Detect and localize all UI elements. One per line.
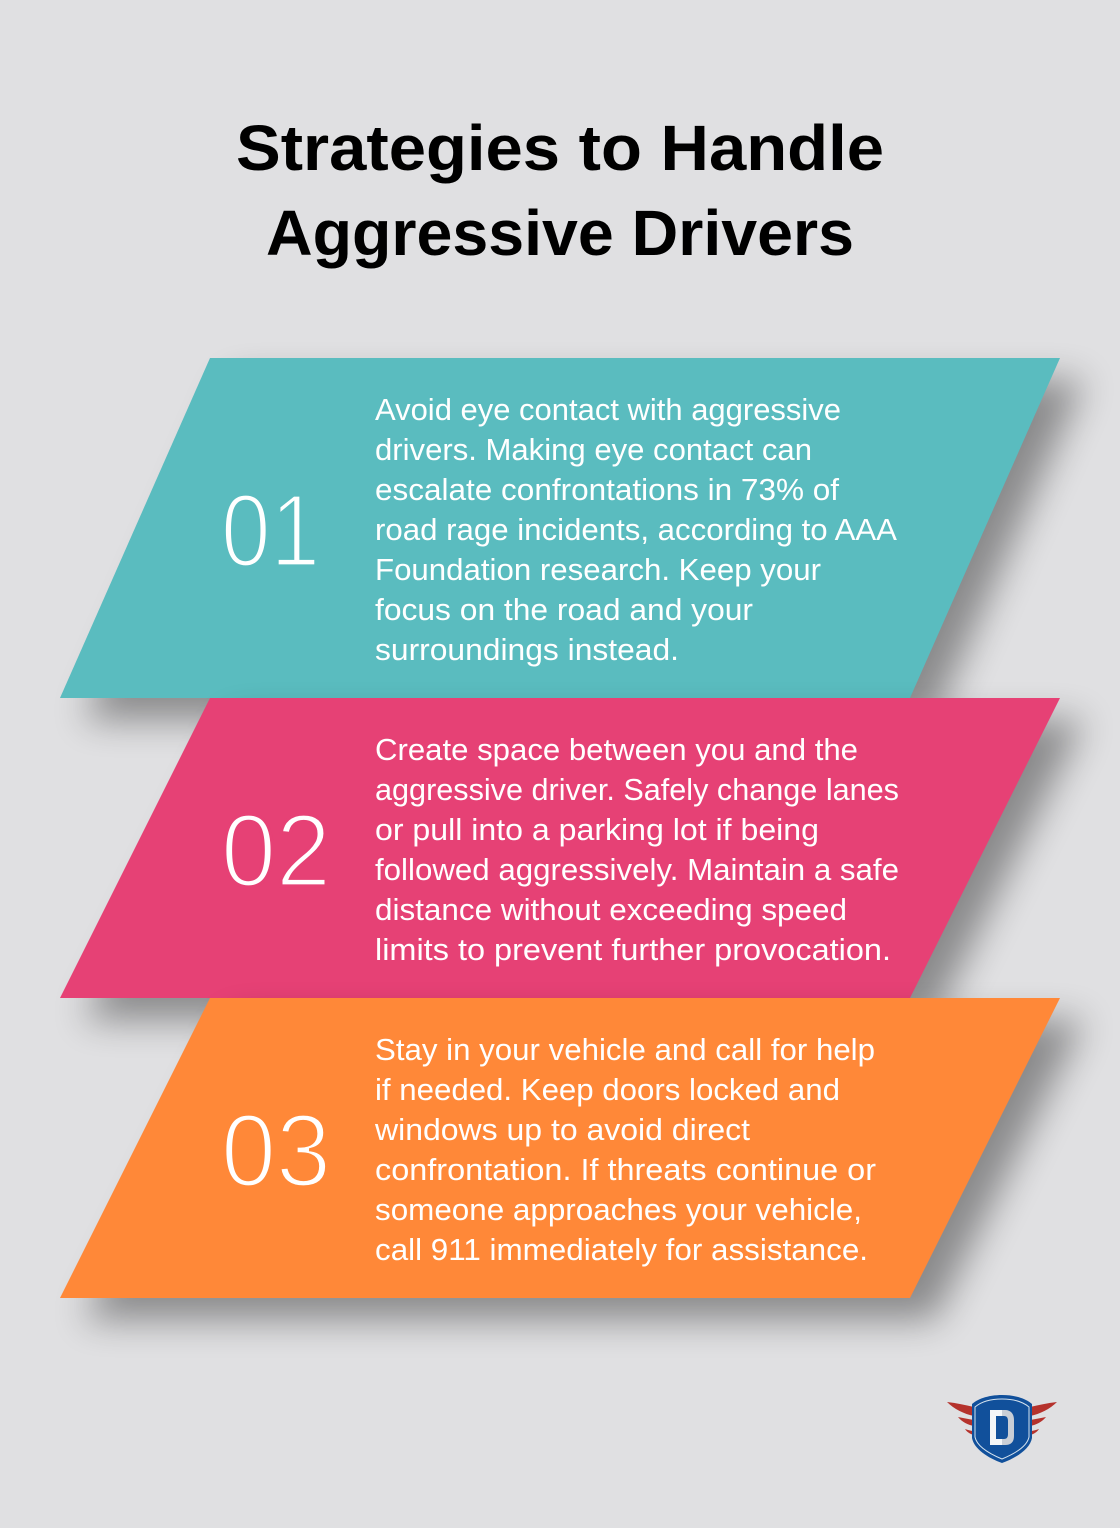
text: step 02: followed aggressively. Maintain a safe bbox=[375, 852, 899, 887]
teal parallelogram bbox=[60, 358, 1060, 698]
text: step 02 bbox=[375, 732, 899, 967]
text: step 01: road rage incidents, according to AAA bbox=[375, 512, 897, 547]
title bbox=[236, 112, 884, 269]
text: step 03: call 911 immediately for assistance. bbox=[375, 1232, 868, 1267]
text: step 03: windows up to avoid direct bbox=[374, 1112, 750, 1147]
title: Strategies to Handle bbox=[236, 112, 884, 184]
text: step 01: escalate confrontations in 73% of bbox=[375, 472, 839, 507]
text: step 02: aggressive driver. Safely change lanes bbox=[375, 772, 899, 807]
text: step 01: surroundings instead. bbox=[375, 632, 679, 667]
orange parallelogram bbox=[60, 998, 1060, 1298]
panel: step 01 bbox=[60, 358, 1084, 720]
number 02: 02 bbox=[221, 793, 331, 908]
text: step 02: limits to prevent further provocation. bbox=[375, 932, 891, 967]
text: step 02: Create space between you and the bbox=[375, 732, 858, 767]
text: step 03: if needed. Keep doors locked and bbox=[375, 1072, 840, 1107]
text: step 01: drivers. Making eye contact can bbox=[375, 432, 812, 467]
text: step 02: or pull into a parking lot if being bbox=[375, 812, 819, 847]
pink parallelogram bbox=[60, 698, 1060, 998]
text: step 01 bbox=[375, 392, 897, 667]
text: step 01: Foundation research. Keep your bbox=[375, 552, 821, 587]
text: step 03: Stay in your vehicle and call for help bbox=[375, 1032, 875, 1067]
text: step 01: focus on the road and your bbox=[375, 592, 753, 627]
number 01: 01 bbox=[221, 473, 320, 588]
text: step 03: someone approaches your vehicle, bbox=[375, 1192, 862, 1227]
text: step 02: distance without exceeding speed bbox=[375, 892, 847, 927]
title: Aggressive Drivers bbox=[266, 197, 854, 269]
panel: step 02 bbox=[60, 698, 1084, 1020]
text: step 01: Avoid eye contact with aggressive bbox=[375, 392, 841, 427]
panel: step 03 bbox=[60, 998, 1084, 1320]
text: step 03: confrontation. If threats continue or bbox=[375, 1152, 876, 1187]
text: step 03 bbox=[374, 1032, 876, 1267]
number 03: 03 bbox=[221, 1093, 331, 1208]
icon: shield logo with wings bbox=[947, 1395, 1057, 1463]
